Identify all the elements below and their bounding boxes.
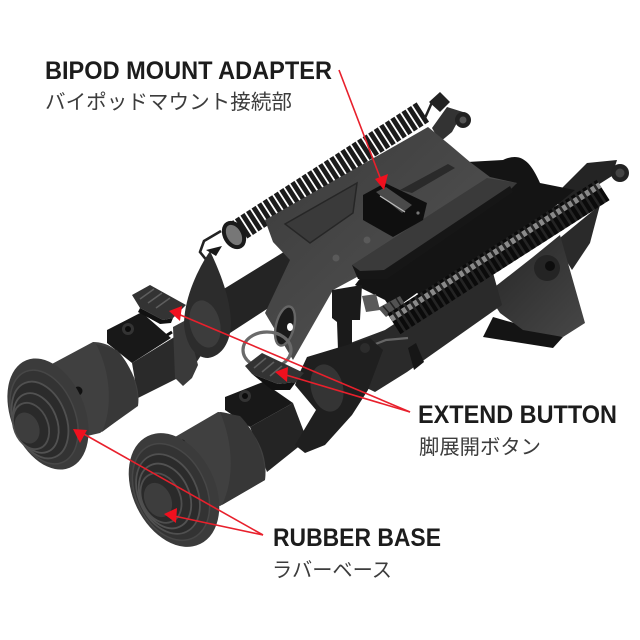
upper spring [200,112,423,262]
mount adapter [363,183,427,237]
label: bipod mount adapter: BIPOD MOUNT ADAPTER [45,57,332,85]
front rail [352,178,517,279]
left leg upper tube [205,250,300,340]
label: bipod mount adapter [45,57,332,114]
left block [107,312,171,363]
right lower tube [250,403,307,472]
left flange plate [184,246,231,358]
left rubber foot [0,346,104,482]
right leg upper tube [345,262,502,392]
right flange plate [295,338,383,453]
mount screws [332,236,370,262]
label: bipod mount adapter: バイポッドマウント接続部 [45,91,292,114]
arrow: bipod mount adapter [339,70,388,190]
right rubber cylinder [175,412,266,506]
label: rubber base [272,524,441,582]
rear lower bracket [483,160,629,348]
rear body [355,157,575,315]
label: rubber base: ラバーベース [272,559,392,582]
label: rubber base: RUBBER BASE [273,524,441,552]
upper right hook [425,92,471,142]
arrows: extend button [169,306,410,412]
label: extend button: 脚展開ボタン [419,436,541,459]
left lower tube [130,322,208,398]
gap behind spring [403,293,422,307]
ring [243,332,291,368]
left rubber cylinder [50,342,138,440]
lower spring [365,185,603,348]
left lower flange [173,320,198,386]
rail pad [285,164,455,243]
label: extend button: EXTEND BUTTON [418,401,617,429]
right extend button [245,353,304,390]
main top mount [265,127,517,360]
left extend button [132,285,186,324]
illustration: bipod [0,92,629,562]
label: extend button [418,401,617,459]
right block [225,382,293,427]
center linkage [271,285,405,350]
arrows: rubber base [73,429,263,535]
right rubber foot [111,418,237,562]
